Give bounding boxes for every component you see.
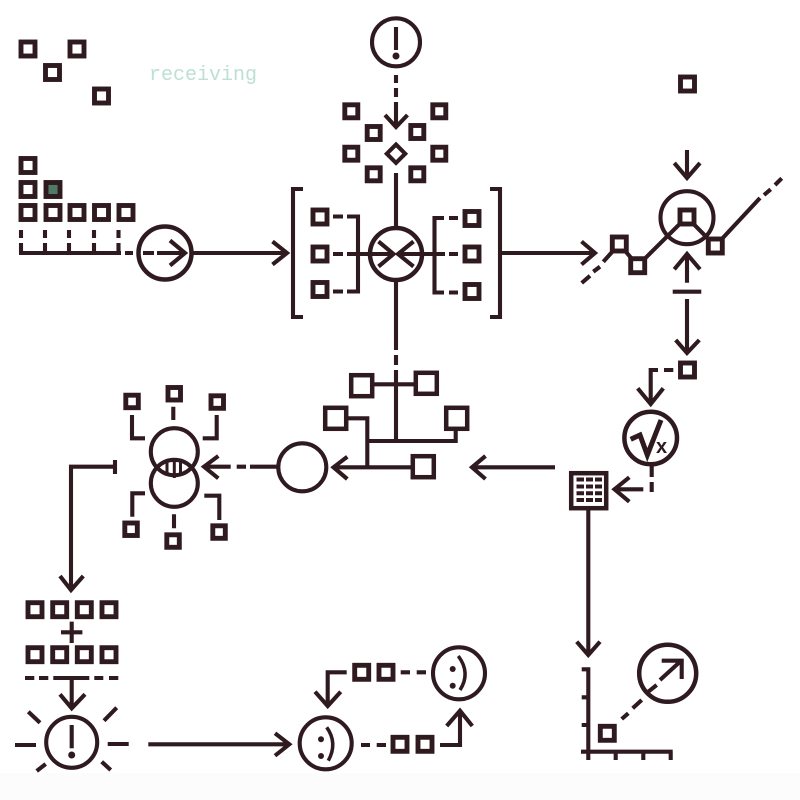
line chart with circled point — [582, 178, 782, 283]
up arrow, bar and down arrow — [673, 254, 701, 353]
right bracket group of squares — [398, 212, 479, 298]
square with dashed arrow — [638, 363, 694, 404]
icon: square root circle — [624, 412, 677, 464]
arrow to central bracket — [193, 242, 287, 264]
icon: grid square — [571, 473, 606, 508]
chart point square — [600, 726, 614, 740]
stacked square bar chart — [19, 158, 133, 253]
dashed link with squares and up arrow — [361, 711, 472, 751]
tree of squares — [325, 373, 467, 479]
icon: smiley lower — [300, 717, 352, 769]
icon: square root circle: x — [656, 436, 667, 458]
empty circle — [278, 443, 326, 491]
icon: central merge circle — [370, 228, 422, 280]
arrow down to circle — [674, 150, 700, 178]
outer brackets — [293, 189, 500, 317]
icon: smiley upper — [433, 647, 485, 699]
dashed link with squares and down arrow — [315, 665, 426, 706]
icon: alert with rays — [15, 708, 129, 771]
icon: overlapping circles with surrounding squares — [125, 388, 225, 547]
arrow to alert sun — [60, 678, 85, 708]
icon: circle with right arrow — [138, 226, 192, 280]
arrow from grid to tree — [472, 456, 555, 479]
ring of squares with diamond — [345, 105, 446, 181]
central connector lines — [394, 173, 398, 441]
arrow to line chart — [500, 242, 595, 264]
scattered squares — [21, 42, 108, 103]
arrow from grid to axes — [577, 510, 600, 655]
icon: alert circle — [372, 18, 420, 66]
left bracket group of squares — [313, 210, 394, 296]
arrow from circles down to squares — [60, 460, 115, 590]
chart axes — [581, 669, 673, 760]
label: receiving: receiving — [149, 64, 257, 87]
dashed arrow to overlapping circles — [204, 456, 277, 478]
top right square — [680, 77, 694, 91]
two rows of squares with plus — [25, 603, 118, 678]
dashed arrow to grid — [614, 466, 652, 502]
long arrow to smiley — [148, 733, 289, 756]
dashed arrow down from alert — [385, 75, 408, 127]
icon: circle with diagonal arrow — [622, 645, 696, 719]
